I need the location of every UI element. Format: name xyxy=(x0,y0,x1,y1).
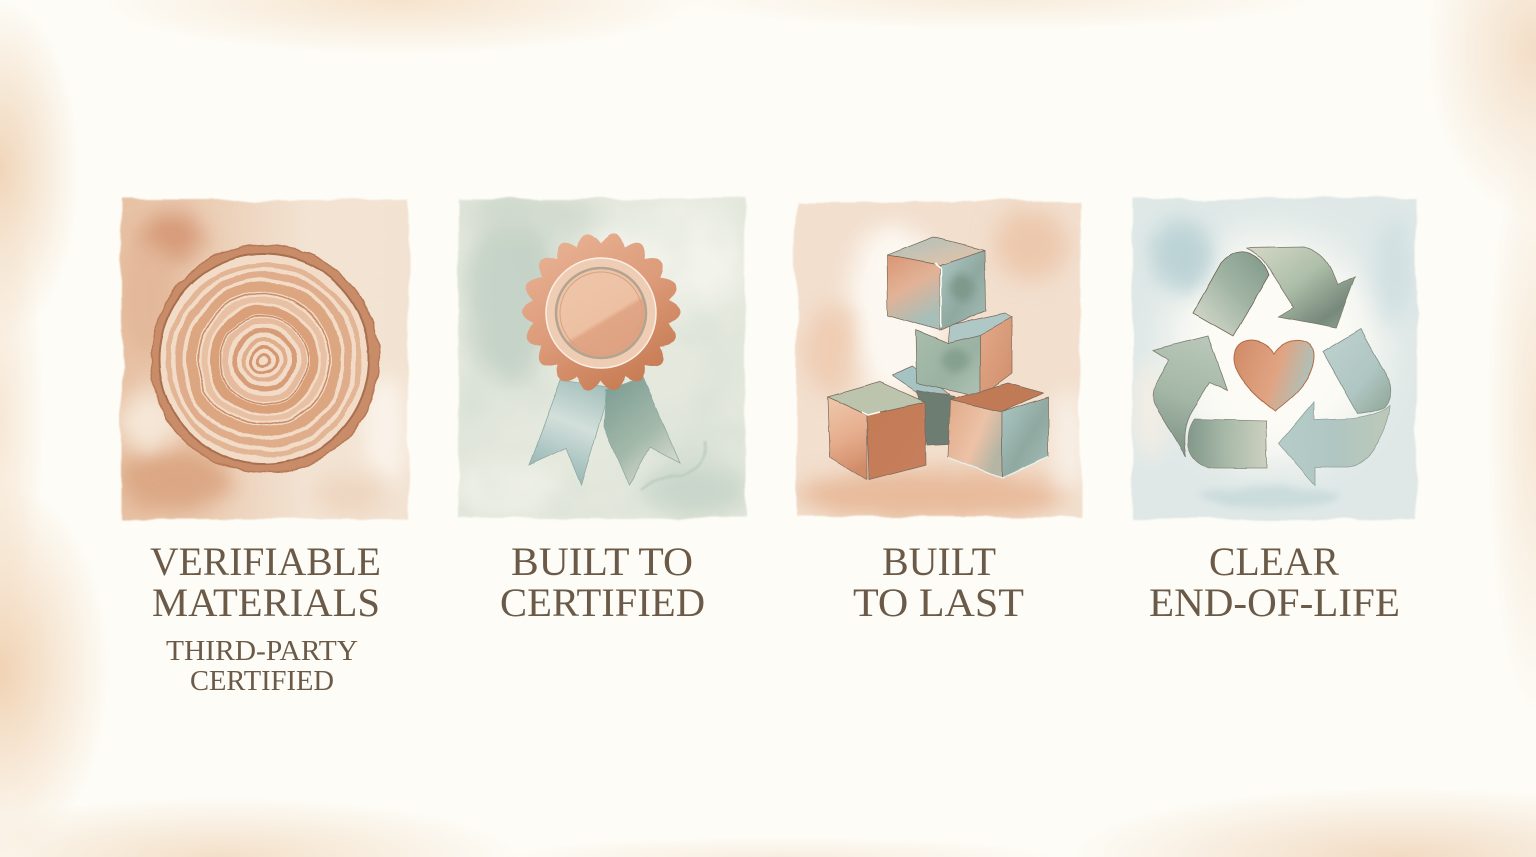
panel: built to last xyxy=(795,201,1088,521)
watercolor square: blue wash xyxy=(1132,199,1417,519)
second block xyxy=(916,313,1012,397)
label: built to certified xyxy=(500,539,705,625)
heart xyxy=(1234,340,1314,411)
label: verifiable materials xyxy=(150,539,381,625)
sub-label: third-party certified: THIRD-PARTY xyxy=(166,635,358,667)
watercolor square: sage wash xyxy=(459,197,750,519)
top block xyxy=(887,237,986,330)
scalloped seal xyxy=(524,235,678,389)
label: built to certified: BUILT TO xyxy=(511,539,693,584)
icon: stacked blocks xyxy=(828,237,1048,480)
icon: award rosette xyxy=(524,235,680,485)
panel: clear end-of-life xyxy=(1132,199,1417,519)
left block xyxy=(828,382,926,480)
left ribbon xyxy=(529,380,610,485)
arrow: left xyxy=(1153,336,1267,468)
sub-label: third-party certified: CERTIFIED xyxy=(190,665,334,697)
right ribbon xyxy=(604,377,680,485)
label: clear end-of-life: END-OF-LIFE xyxy=(1149,580,1400,625)
arrow: right xyxy=(1279,329,1391,485)
seal disc xyxy=(546,258,656,368)
label: built to last: BUILT xyxy=(882,539,996,584)
panel: built to certified xyxy=(459,197,750,519)
label: built to certified: CERTIFIED xyxy=(500,580,705,625)
label: verifiable materials: VERIFIABLE xyxy=(150,539,381,584)
icon: tree cross-section xyxy=(151,245,379,473)
arrow: top xyxy=(1193,247,1355,336)
back dark block xyxy=(892,366,955,445)
label: built to last: TO LAST xyxy=(853,580,1024,625)
watercolor square: peach wash xyxy=(795,201,1088,521)
label: built to last xyxy=(853,539,1024,625)
label: clear end-of-life: CLEAR xyxy=(1209,539,1339,584)
watercolor square: terracotta wash xyxy=(120,200,408,519)
label: verifiable materials: MATERIALS xyxy=(152,580,380,625)
icon: recycling arrows with heart xyxy=(1153,247,1391,485)
sub-label: third-party certified xyxy=(166,635,358,697)
label: clear end-of-life xyxy=(1149,539,1400,625)
right block xyxy=(948,383,1048,478)
panel: verifiable materials xyxy=(120,200,408,519)
